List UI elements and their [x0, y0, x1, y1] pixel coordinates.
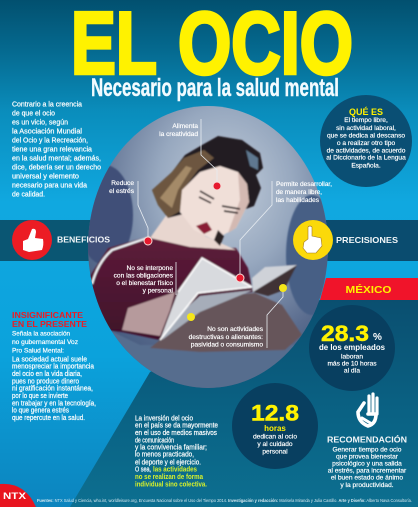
intro text: la Asociación Mundial [12, 126, 82, 136]
label: no son actividades: destructivas o alienantes: [189, 334, 263, 341]
book edge highlight [160, 258, 252, 340]
stat circle: 28.3%: más de 10 horas [327, 360, 377, 368]
label: reduce el estrés: Reduce [111, 180, 134, 187]
intro text: es un vicio, según [12, 118, 68, 126]
intro text: de calidad. [12, 190, 45, 198]
beneficios badge: BENEFICIOS [57, 234, 110, 244]
qué es circle: de actividades, de acuerdo [327, 148, 406, 154]
stat circle: 28.3% [309, 305, 395, 391]
insignificante heading: EN EL PRESENTE [12, 319, 87, 329]
dot: skills [236, 181, 272, 282]
inversión text: y la convivencia familiar; [135, 442, 207, 452]
left hand [122, 292, 175, 336]
label: reduce el estrés [109, 180, 135, 195]
stat circle: 12.8: dedican al ocio [253, 434, 297, 440]
icon: thumbs up [23, 229, 43, 252]
méxico band: MÉXICO [346, 283, 392, 296]
intro text: dice, debería ser un derecho [12, 162, 101, 172]
insignificante heading [12, 310, 87, 329]
qué es circle: El tiempo libre, [344, 117, 388, 124]
inversión text: O sea, [135, 464, 151, 474]
circle backdrop [85, 100, 335, 395]
face [180, 166, 249, 240]
méxico band [320, 278, 418, 300]
sources footer: Fuentes: NTX Salud y Ciencia, who.int, worldleisure.org, Encuesta Nacional sobre el Uso del Tiempo 2014. Investigación y redacción: Marisela Miranda y Julia Castillo. Arte y Diseño: Alberto Nava Consultoría. [37, 498, 412, 503]
insignificante body: La sociedad actual suele [12, 354, 87, 364]
qué es circle: sin actividad laboral, [336, 125, 396, 132]
inversión text: La inversión del ocio [135, 414, 193, 422]
stat circle: 28.3%: % [373, 332, 382, 343]
intro text: necesario para una vida [12, 180, 88, 190]
stat circle: 12.8: personal [262, 448, 288, 456]
band: beneficios [0, 220, 110, 261]
hair bun highlight [246, 150, 258, 170]
label: no son actividades: pasividad o consumismo [191, 342, 263, 348]
insignificante intro: Pro Salud Mental: [12, 348, 64, 354]
inversión text: en el país se da mayormente [135, 420, 218, 430]
label: no se interpone [114, 265, 174, 294]
band: precisiones [300, 220, 418, 261]
stat circle: 12.8: y al cuidado [257, 441, 293, 448]
lower backdrop shade [112, 330, 294, 388]
icon: ok hand [358, 394, 377, 426]
mouth [196, 222, 212, 234]
label: alimenta la creatividad: la creatividad [159, 131, 198, 138]
recomendación [327, 434, 407, 489]
shoulder highlight [92, 237, 150, 284]
inversión text: el deporte y el ejercicio. [135, 458, 201, 466]
hair [152, 136, 263, 218]
insignificante body: pues no produce dinero [12, 376, 79, 386]
qué es circle: que se dedica al descanso [327, 132, 405, 140]
book spine shadow [253, 265, 297, 296]
precisiones badge [293, 220, 398, 260]
qué es circle: Española. [351, 162, 381, 170]
label: reduce el estrés: el estrés [109, 188, 135, 195]
insignificante intro [12, 330, 78, 354]
dot: creativity [201, 119, 221, 190]
earring [214, 230, 224, 246]
label: alimenta la creatividad [159, 123, 198, 138]
intro text: universal y elemento [12, 172, 79, 180]
icon: pointing hand [303, 226, 322, 253]
illustration circle: woman reading [88, 106, 328, 388]
intro text [12, 100, 101, 198]
label: permite desarrollar: de manera libre, [276, 189, 322, 196]
insignificante body: del ocio en la vida diaria, [12, 369, 82, 378]
face shadow [228, 172, 249, 233]
book right page [252, 265, 297, 292]
label: no son actividades [189, 326, 264, 348]
insignificante body [12, 354, 96, 422]
intro text: del Ocio y la Recreación, [12, 136, 88, 144]
inversión text [135, 414, 218, 488]
qué es circle: al Diccionario de la Lengua [326, 154, 406, 162]
brows and eyes [199, 191, 240, 213]
insignificante body: por lo que se invierte [12, 391, 68, 400]
dot: stress [138, 181, 152, 245]
insignificante heading: INSIGNIFICANTE [12, 310, 83, 320]
recomendación: psicológico y una salida [332, 460, 402, 468]
dot: consumerism [267, 284, 287, 348]
grey book page [162, 290, 253, 340]
stat circle: 12.8: horas [264, 424, 286, 433]
label: permite desarrollar: Permite desarrollar, [276, 181, 332, 188]
label: no se interpone: y personal [143, 288, 174, 294]
intro text: Contrario a la creencia [12, 100, 83, 108]
dot: obligations [187, 313, 195, 321]
logo: NTX: NTX [3, 491, 27, 502]
insignificante body: ni gratificación instantánea, [12, 384, 93, 392]
logo: NTX [0, 484, 36, 507]
blond hair highlights [160, 166, 192, 208]
heading: qué es: QUÉ ES [349, 107, 383, 117]
blond hair [152, 150, 214, 218]
inversión text: lo menos practicado, [135, 450, 194, 458]
stat circle: 28.3%: 28.3 [321, 321, 369, 346]
stat circle: 28.3%: laboran [341, 354, 363, 360]
insignificante intro: Señala la asociación [12, 330, 70, 338]
inversión text: no se realizan de forma [135, 472, 204, 481]
recomendación: y la productividad. [340, 482, 394, 489]
inversión text: de comunicación [135, 436, 174, 444]
insignificante intro: no gubernamental Voz [12, 339, 78, 346]
inversión text: individual sino colectiva. [135, 480, 207, 488]
inversión text: en el uso de medios masivos [135, 428, 217, 437]
lower skirt and hand [150, 293, 302, 352]
sweater [86, 236, 253, 340]
recomendación: que provea bienestar [336, 454, 399, 460]
insignificante body: lo que genera estrés [12, 406, 69, 414]
stat circle: 12.8: 12.8 [251, 400, 299, 426]
left dark backdrop [88, 166, 134, 264]
dark lower-right panel [70, 300, 418, 507]
label: alimenta la creatividad: Alimenta [172, 123, 198, 130]
insignificante body: en trabajar y en la tecnología, [12, 398, 96, 408]
intro text: de que el ocio [12, 108, 55, 118]
label: no son actividades: No son actividades [207, 326, 264, 333]
label: no se interpone: con las obligaciones [114, 272, 174, 280]
title [71, 0, 353, 92]
insignificante body: que repercute en la salud. [12, 413, 85, 422]
stat circle: 12.8 [232, 383, 318, 469]
neck and chest [150, 214, 236, 252]
line: obligations label [175, 262, 177, 295]
book left page [160, 258, 252, 340]
label: permite desarrollar: las habilidades [276, 197, 320, 204]
right dark backdrop [285, 194, 328, 315]
insignificante body: menospreciar la importancia [12, 362, 95, 370]
label: no se interpone: No se interpone [126, 265, 173, 272]
inversión text: las actividades [153, 464, 197, 474]
recomendación: Generar tiempo de ocio [333, 446, 402, 454]
beneficios badge [12, 220, 110, 260]
stat circle: 28.3%: al día [344, 368, 360, 374]
intro text: en la salud mental; además, [12, 154, 101, 162]
intro text: tiene una gran relevancia [12, 144, 93, 154]
precisiones badge: PRECISIONES [336, 235, 398, 245]
qué es circle: o a realizar otro tipo [337, 140, 395, 147]
label: permite desarrollar [276, 181, 332, 204]
recomendación: RECOMENDACIÓN [327, 434, 407, 444]
qué es circle [320, 95, 412, 187]
label: no se interpone: o el bienestar físico [116, 280, 173, 287]
stat circle: 28.3%: de los empleados [319, 343, 386, 352]
recomendación: al estrés, para incrementar [328, 468, 407, 474]
recomendación: el buen estado de ánimo [331, 474, 403, 482]
